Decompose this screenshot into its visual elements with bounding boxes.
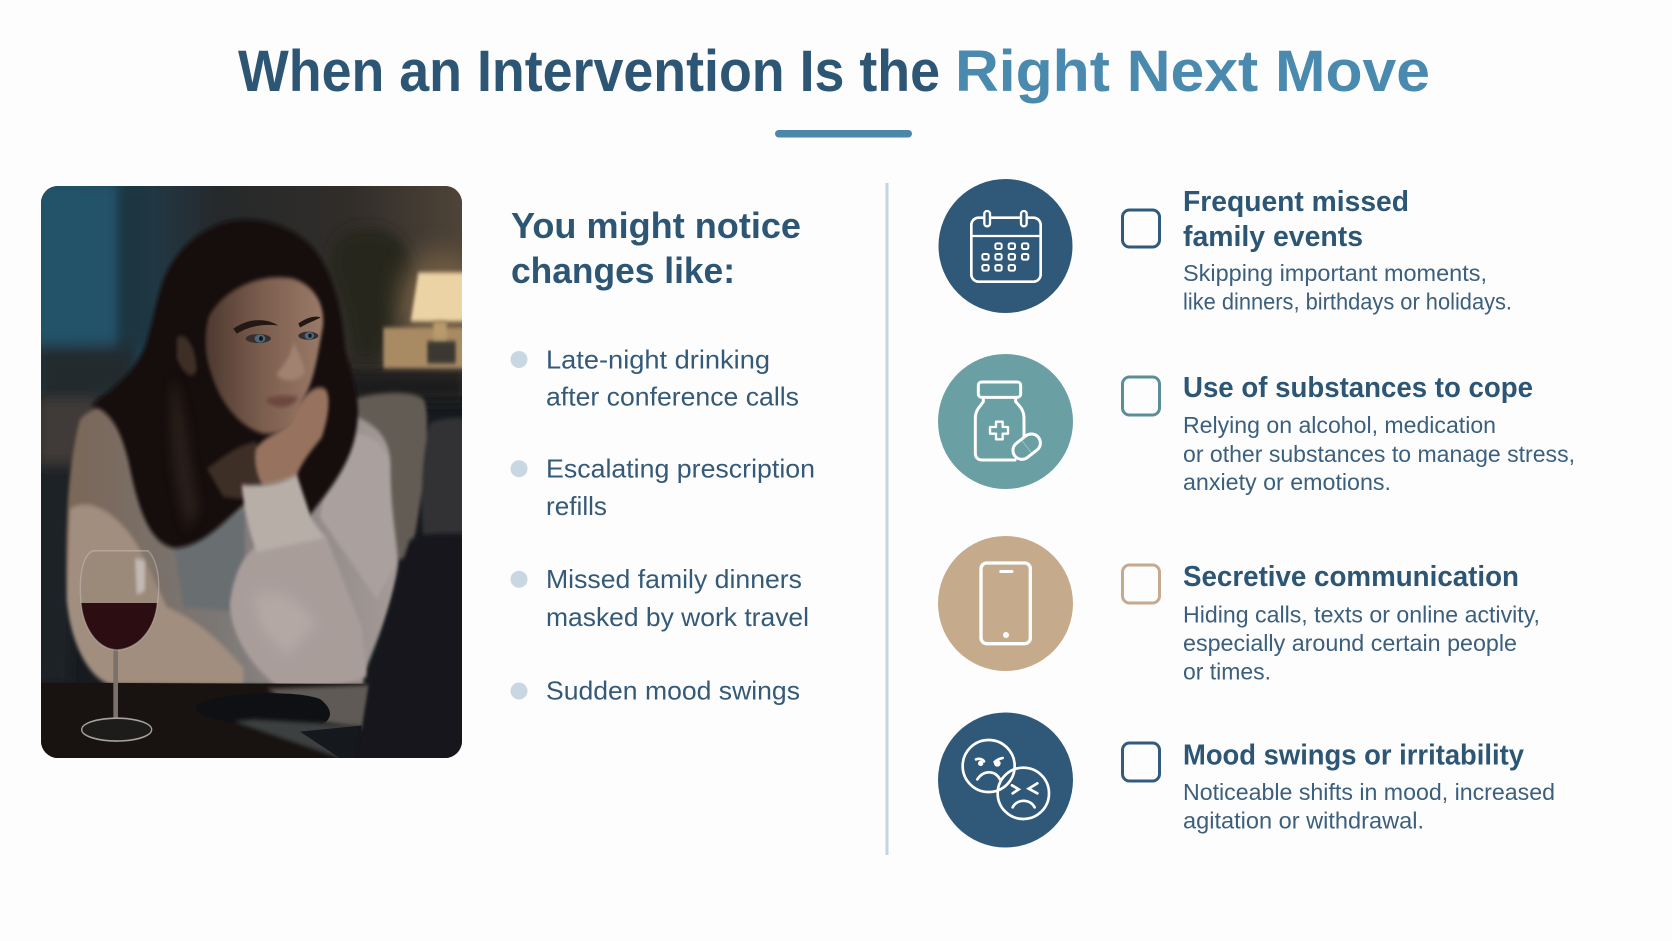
left heading: You might notice	[511, 205, 801, 246]
hand	[255, 387, 329, 487]
eyes	[246, 334, 271, 343]
photo: woman thinking at night with wine glass	[33, 183, 483, 766]
bullet list	[510, 344, 815, 706]
checkbox	[1122, 210, 1160, 247]
bullet: late-night drinking: Late-night drinking	[546, 344, 770, 374]
item text: Hiding calls, texts or online activity,	[1183, 601, 1540, 627]
left heading	[511, 205, 801, 291]
item text: like dinners, birthdays or holidays.	[1183, 288, 1512, 314]
icon: two upset faces	[938, 712, 1073, 848]
checkbox	[1122, 377, 1160, 415]
item: secretive communication	[938, 536, 1540, 684]
checkbox	[1122, 743, 1160, 781]
bullet: prescription refills: Escalating prescription	[546, 453, 815, 483]
item text: agitation or withdrawal.	[1183, 807, 1424, 833]
left heading: changes like:	[511, 250, 735, 291]
bullet: missed dinners	[510, 564, 809, 632]
lamp	[381, 243, 462, 372]
bullet: mood swings: Sudden mood swings	[546, 676, 800, 706]
bullet: prescription refills: refills	[546, 491, 607, 521]
item text: anxiety or emotions.	[1183, 469, 1391, 495]
item text	[1183, 561, 1540, 684]
nose and lips	[277, 342, 305, 380]
vertical divider	[886, 183, 888, 855]
title underline	[775, 130, 912, 138]
item: mood swings or irritability	[938, 712, 1555, 848]
bullet: prescription refills	[510, 453, 815, 521]
neck and chest	[207, 442, 263, 499]
title	[238, 39, 1430, 104]
sleeve	[230, 474, 367, 688]
item text: or times.	[1183, 658, 1271, 684]
bullet: late-night drinking: after conference calls	[546, 382, 799, 412]
item: use of substances to cope	[938, 354, 1575, 495]
title: When an Intervention Is the	[238, 39, 940, 104]
bullet: missed dinners: masked by work travel	[546, 602, 809, 632]
plant	[330, 228, 413, 362]
item text: especially around certain people	[1183, 630, 1517, 656]
face	[205, 277, 323, 434]
item text: Frequent missed	[1183, 186, 1409, 218]
item: frequent missed family events	[938, 179, 1512, 314]
brows	[233, 320, 278, 334]
icon: smartphone	[938, 536, 1073, 671]
item text: Secretive communication	[1183, 561, 1519, 593]
item text	[1183, 740, 1555, 833]
checkbox	[1122, 565, 1160, 603]
sofa	[353, 393, 467, 562]
item text: Skipping important moments,	[1183, 260, 1487, 286]
table and devices	[33, 534, 467, 762]
item text: Mood swings or irritability	[1183, 740, 1524, 772]
wine glass	[80, 551, 159, 741]
icon: medicine bottle and pill	[938, 354, 1073, 489]
hair	[92, 219, 358, 548]
sweater	[66, 404, 398, 686]
bullet: late-night drinking	[510, 344, 799, 412]
item text: family events	[1183, 221, 1363, 253]
bullet: missed dinners: Missed family dinners	[546, 564, 802, 594]
item text: or other substances to manage stress,	[1183, 441, 1575, 467]
icon: calendar	[938, 179, 1072, 313]
title: Right Next Move	[955, 39, 1430, 104]
item text: Use of substances to cope	[1183, 372, 1533, 404]
item text	[1183, 186, 1512, 314]
item text: Noticeable shifts in mood, increased	[1183, 779, 1555, 805]
item text: Relying on alcohol, medication	[1183, 412, 1496, 438]
item text	[1183, 372, 1575, 495]
